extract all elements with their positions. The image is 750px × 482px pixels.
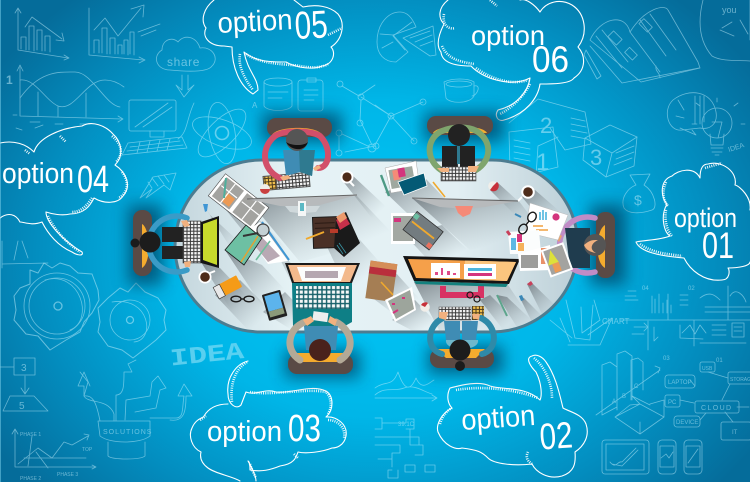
green notebook, paper and magnifier — [225, 222, 289, 265]
doodle: right charts: 02 — [688, 286, 695, 292]
label: option 02: option — [460, 400, 536, 437]
brown box and paper: center bottom — [365, 261, 416, 322]
doodle: cloud network — [665, 362, 750, 440]
doodle: right charts: 03 — [663, 356, 670, 362]
glasses — [467, 292, 480, 302]
coffee cup: top — [340, 170, 354, 186]
ball: top right — [488, 181, 499, 191]
label: option 01: option — [674, 203, 737, 233]
doodle: cubes 1 2 3: 1 — [536, 149, 549, 176]
doodle: can and clipboard — [264, 78, 323, 111]
label: option 03: 03 — [288, 408, 321, 450]
cloud: option 01 — [636, 163, 750, 280]
person: left, laptop — [130, 210, 219, 276]
doodle: right charts — [550, 286, 750, 364]
tablet — [262, 290, 287, 321]
doodle: wave chart and flow chart — [375, 372, 437, 478]
left edge highlight — [0, 0, 1, 482]
top monitor — [247, 195, 357, 216]
doodle: 3d bars — [596, 351, 660, 415]
label: option 05: option — [217, 4, 293, 40]
doodle: money bag — [623, 174, 655, 213]
doodle: cloud network: CLOUD — [701, 405, 733, 412]
doodle: frame top right: you — [722, 5, 737, 15]
doodle: wave chart and flow chart: 39.1C — [398, 422, 415, 428]
person: top left, red — [260, 118, 332, 194]
table items: top left notebook — [208, 174, 269, 230]
doodle: solutions arrows: SOLUTIONS — [103, 429, 152, 436]
doodle: network — [336, 81, 426, 156]
doodle: flow box 3 and 5: 5 — [19, 401, 25, 412]
doodle: 3d bars: A — [612, 399, 616, 405]
doodle: 3d bars: C — [634, 384, 639, 390]
heading: IDEA: IDEA — [169, 339, 246, 374]
doodle: frame top right — [700, 0, 750, 61]
doodle: small arrow left — [140, 173, 176, 198]
top right monitor — [412, 198, 518, 217]
cloud: option 03 — [190, 361, 346, 481]
doodle: right charts: 04 — [642, 286, 649, 292]
stand — [440, 286, 484, 298]
cloud: option 04 — [0, 124, 127, 255]
doodle: 3d bars: B — [622, 394, 626, 400]
pencil on notebook — [224, 178, 226, 198]
chair shadows — [128, 112, 626, 378]
label: option 04: option — [2, 158, 74, 190]
doodle: atom: A — [252, 101, 258, 110]
cloud: option 06 — [438, 0, 584, 120]
doodle: cubes 1 2 3: 2 — [540, 113, 552, 138]
person: right, papers — [554, 212, 615, 278]
person: top right, green — [427, 116, 493, 181]
wallet and black book — [306, 212, 360, 257]
label: option 01: 01 — [702, 225, 734, 266]
glasses: left — [231, 296, 254, 302]
long shadows on table — [201, 175, 565, 332]
label: option 03: option — [207, 416, 282, 448]
coffee cup: left — [198, 270, 215, 284]
person: bottom left, beige with laptop — [285, 263, 360, 374]
person: bottom right, monitor — [403, 256, 520, 371]
pin — [203, 204, 208, 212]
doodle: bottom left chart: TOP — [82, 447, 93, 453]
papers: center right — [391, 211, 443, 250]
coffee cup: right — [518, 185, 535, 201]
doodle: cloud network: IT — [732, 430, 738, 436]
meeting table — [175, 160, 578, 332]
keyboard — [439, 307, 471, 320]
doodle: pies and cup — [377, 12, 478, 102]
doodle: bottom left chart: PHASE 3 — [57, 472, 78, 478]
doodle: tablet and phones — [602, 440, 702, 474]
top right papers — [381, 161, 445, 197]
doodle: money bag: $ — [634, 192, 642, 208]
doodle: speech note and bulb: IDEA — [727, 142, 745, 154]
doodle: monitor and keyboard — [122, 100, 194, 155]
doodles: top left charts — [6, 5, 160, 130]
orange phone — [213, 275, 242, 299]
doodle: cloud network: USB — [702, 366, 713, 372]
doodle: bottom left chart: PHASE 2 — [20, 476, 41, 482]
label: option 04: 04 — [77, 159, 109, 201]
monitor — [403, 256, 520, 284]
ball — [260, 184, 270, 194]
doodle: bottom left chart: PHASE 1 — [20, 432, 41, 438]
doodle: cloud network: PC — [668, 400, 677, 406]
cloud: option 05 — [203, 0, 342, 94]
doodles: top left charts: 1 — [6, 73, 13, 87]
right side papers and chart — [507, 203, 573, 278]
doodle: gears — [14, 263, 166, 358]
doodle: atom — [188, 100, 258, 166]
doodle: flow box 3 and 5 — [0, 358, 48, 412]
green pencil and pins — [497, 281, 533, 316]
keyboard — [262, 172, 311, 191]
doodle: share cloud — [156, 37, 215, 97]
doodle: cloud network: DEVICE — [676, 420, 698, 426]
laptop — [285, 263, 360, 326]
doodle: share cloud: share — [167, 55, 200, 69]
doodle: speech note and bulb — [667, 93, 745, 155]
label: option 05: 05 — [294, 3, 329, 48]
doodle: left mini chart — [2, 241, 48, 268]
doodle: cubes 1 2 3: 3 — [590, 145, 602, 170]
ball: bottom — [420, 302, 430, 312]
doodle: flow box 3 and 5: 3 — [21, 363, 27, 374]
doodle: cubes 1 2 3 — [509, 99, 637, 177]
cloud: option 02 — [438, 355, 587, 477]
doodle: right charts: 01 — [716, 358, 723, 364]
doodle: solutions arrows — [78, 360, 192, 459]
label: option 02: 02 — [538, 414, 574, 458]
label: option 06: option — [471, 20, 545, 51]
doodle: open box — [615, 396, 664, 434]
doodle: bottom left chart — [12, 429, 96, 482]
doodle: cloud network: LAPTOP — [668, 380, 692, 386]
doodle: open book — [584, 8, 700, 83]
label: option 06: 06 — [532, 39, 569, 80]
doodle: right charts: CHART — [602, 317, 630, 326]
